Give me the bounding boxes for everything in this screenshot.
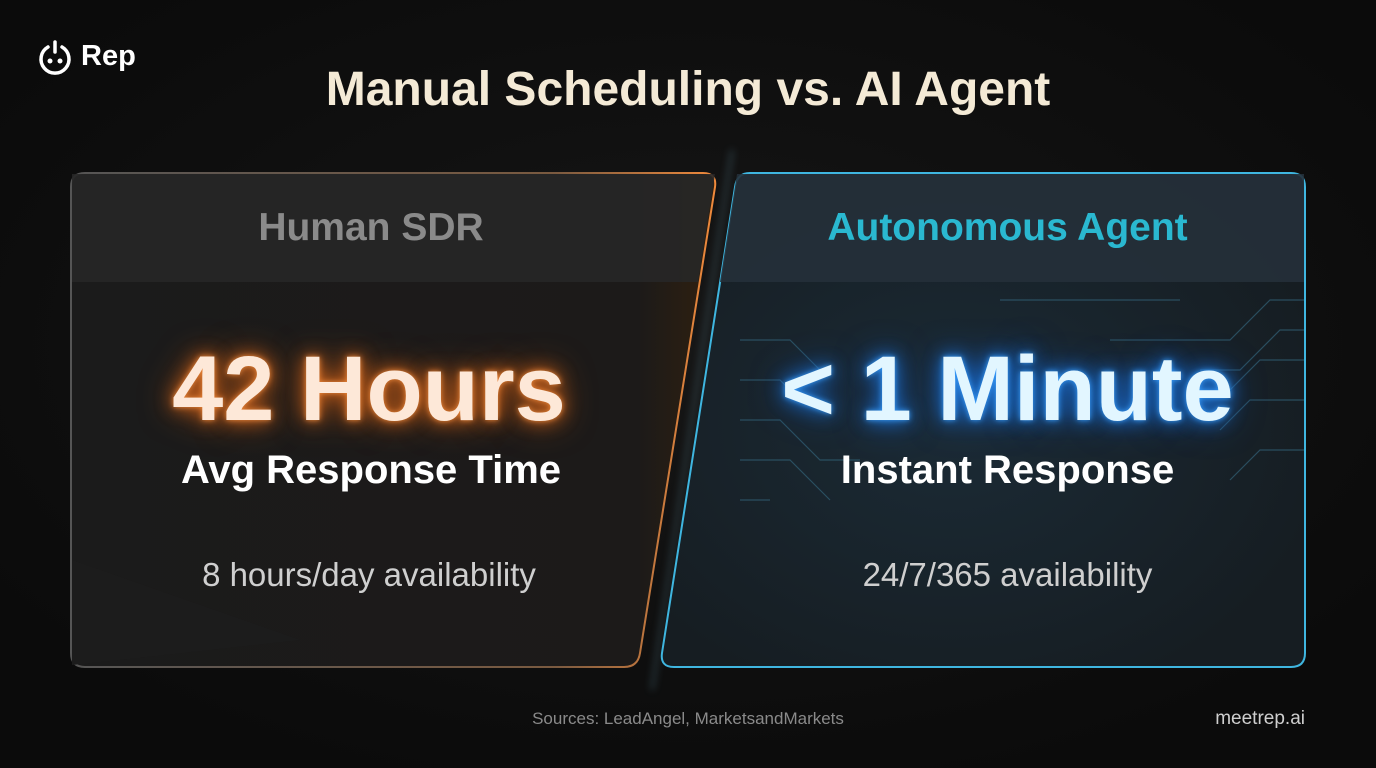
right heading: Autonomous Agent (827, 206, 1188, 249)
left label: Avg Response Time (181, 448, 561, 492)
left panel (71, 173, 715, 667)
website: meetrep.ai (1215, 708, 1305, 729)
logo (39, 40, 136, 75)
left heading: Human SDR (258, 206, 484, 249)
right panel (662, 173, 1305, 667)
right stat: < 1 Minute (781, 338, 1234, 440)
right availability: 24/7/365 availability (863, 556, 1152, 593)
logo: Rep (81, 40, 136, 72)
sources: Sources: LeadAngel, MarketsandMarkets (532, 709, 844, 728)
divider glow (652, 150, 732, 690)
title: Manual Scheduling vs. AI Agent (326, 63, 1050, 116)
left stat: 42 Hours (172, 338, 566, 440)
right label: Instant Response (841, 448, 1174, 492)
left availability: 8 hours/day availability (202, 556, 536, 593)
